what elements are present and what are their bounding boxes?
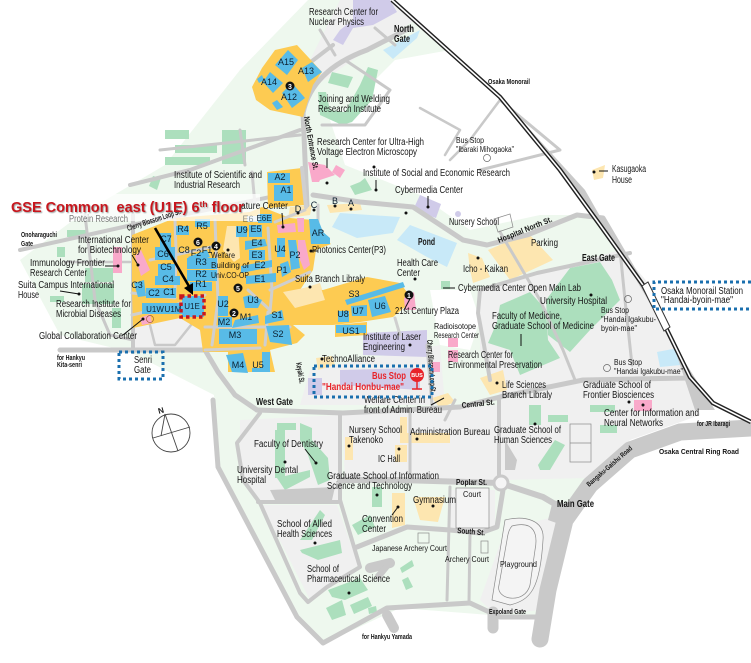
building name labels: Nursery School <box>449 217 499 228</box>
building name labels: Cybermedia Center Open Main Lab <box>458 283 581 294</box>
building name labels: Life Sciences <box>502 380 546 391</box>
green faculty buildings <box>50 67 620 620</box>
pink special buildings <box>113 162 652 411</box>
building name labels: School of Allied <box>277 519 332 530</box>
building name labels: Icho - Kaikan <box>463 264 508 275</box>
building name labels: Japanese Archery Court <box>372 544 448 553</box>
pale yellow facilities <box>282 165 605 528</box>
building codes: U1E <box>184 302 200 311</box>
building codes: S3 <box>348 289 360 299</box>
building name labels: Frontier Biosciences <box>583 390 654 401</box>
building name labels: for Biotechnology <box>78 245 141 256</box>
building name labels: Protein Research <box>69 214 128 225</box>
building codes: U9 <box>236 225 248 235</box>
numbered building markers: 5 <box>236 286 240 293</box>
building name labels: Gymnasium <box>413 495 456 506</box>
building codes: C6 <box>157 249 169 259</box>
buildings A12 to A15 <box>257 50 322 110</box>
building codes: C <box>311 200 318 210</box>
building name labels: Health Sciences <box>277 529 332 540</box>
building codes: E6E <box>256 214 272 223</box>
building name labels: ature Center <box>241 201 289 212</box>
building codes: E6 <box>242 214 254 224</box>
building codes: F2 <box>191 248 201 258</box>
building name labels: Voltage Electron Microscopy <box>317 147 417 158</box>
building codes: A13 <box>298 66 314 76</box>
building name labels: House <box>18 290 39 301</box>
building name labels: "Ibaraki Mihogaoka" <box>456 145 514 154</box>
building name labels: Global Collaboration Center <box>39 331 138 342</box>
building codes: D <box>295 204 302 214</box>
building codes: P2 <box>289 250 301 260</box>
compass: N <box>157 406 165 416</box>
building name labels: Industrial Research <box>174 180 240 191</box>
building name labels: Kita-senri <box>57 362 82 369</box>
building name labels: Faculty of Medicine, <box>492 311 562 322</box>
building name labels: Research Institute <box>318 104 381 115</box>
building codes: S2 <box>272 329 284 339</box>
title: GSE Common east (U1E) 6 <box>11 200 200 216</box>
building codes: C1 <box>163 287 175 297</box>
building name labels: Osaka Monorail <box>488 79 530 86</box>
building name labels: Suita Campus International <box>18 280 114 291</box>
building name labels: "Handai Igakubu-mae" <box>614 367 683 376</box>
building name labels: School of <box>307 564 339 575</box>
building name labels: Administration Bureau <box>410 427 490 438</box>
water: ponds <box>332 30 681 367</box>
building name labels: Takenoko <box>349 435 383 446</box>
building name labels: Graduate School of <box>494 425 561 436</box>
gate and street labels: Main Gate <box>557 499 594 510</box>
building name labels: Research Center <box>434 331 479 340</box>
gate and street labels: South St. <box>457 526 486 537</box>
gate and street labels: Bangaku-Gaishu Road <box>586 445 634 489</box>
building name labels: Immunology Frontier <box>30 258 106 269</box>
building name labels: Research Institute for <box>56 299 132 310</box>
building codes: C5 <box>160 262 172 272</box>
building name labels: Bus Stop <box>614 358 642 367</box>
numbered building markers: 3 <box>288 84 292 91</box>
highlight: U1E building <box>181 296 204 317</box>
building name labels: Pharmaceutical Science <box>307 574 390 585</box>
building name labels: Photonics Center(P3) <box>312 245 386 256</box>
internal campus roads <box>132 168 400 350</box>
building name labels: Onoharaguchi <box>21 232 57 239</box>
building name labels: House <box>612 175 632 186</box>
building name labels: TechnoAlliance <box>322 354 375 365</box>
building codes: R2 <box>195 269 207 279</box>
building name labels: International Center <box>78 235 150 246</box>
highlight: Senri Gate: Gate <box>134 365 151 376</box>
building codes: R5 <box>196 221 208 231</box>
buildings S and U6 to U8 <box>265 282 405 345</box>
monorail station <box>642 282 670 331</box>
building name labels: Parking <box>531 238 558 249</box>
building name labels: Institute of Scientific and <box>174 170 262 181</box>
map markers <box>78 166 644 594</box>
building codes: R1 <box>195 279 207 289</box>
building name labels: Engineering <box>363 342 405 353</box>
main campus yellow zone <box>113 45 652 411</box>
building name labels: Suita Branch Libraly <box>295 274 365 285</box>
building name labels: IC Hall <box>378 454 400 465</box>
building codes: U2 <box>217 299 229 309</box>
building codes: U8 <box>337 309 349 319</box>
arrow to U1E <box>155 228 193 295</box>
building codes: M1 <box>240 312 252 322</box>
building codes: A14 <box>261 77 277 87</box>
building name labels: Research Center for Ultra-High <box>317 137 424 148</box>
building name labels: Research Center <box>30 268 88 279</box>
building name labels: front of Admin. Bureau <box>364 405 442 416</box>
gate and street labels: Hospital North St. <box>496 215 554 245</box>
gate and street labels <box>126 116 634 537</box>
building name labels: Graduate School of Information <box>327 471 439 482</box>
building codes: F1 <box>202 245 212 255</box>
numbered building markers: 4 <box>214 244 218 251</box>
building name labels: Human Sciences <box>494 435 552 446</box>
building name labels: Science and Technology <box>327 481 412 492</box>
buildings A1 and A2 <box>268 173 293 201</box>
building codes: A1 <box>280 185 292 195</box>
building codes: U6 <box>374 301 386 311</box>
building name labels: Graduate School of Medicine <box>492 321 594 332</box>
building codes: E5 <box>250 224 262 234</box>
building name labels: for Hankyu <box>57 355 85 362</box>
building codes: C4 <box>162 274 174 284</box>
gate and street labels: West Gate <box>256 397 293 408</box>
building name labels: Welfare Center in <box>364 395 425 406</box>
building name labels: Bus Stop <box>601 306 629 315</box>
building name labels: North <box>394 24 414 35</box>
building name labels: Microbial Diseases <box>56 309 121 320</box>
building name labels: Pond <box>418 237 435 248</box>
building name labels: Center <box>397 268 421 279</box>
numbered building markers <box>194 82 414 318</box>
building name labels: Univ.CO-OP <box>211 270 249 280</box>
building name labels: Nursery School <box>349 425 402 436</box>
building codes: C3 <box>131 280 143 290</box>
gate and street labels: Central St. <box>461 398 495 410</box>
building codes: U1W <box>146 305 164 314</box>
building codes: A2 <box>274 172 286 182</box>
building codes: AR <box>312 228 325 238</box>
building codes: A12 <box>281 92 297 102</box>
building codes: M2 <box>218 317 230 327</box>
building codes: E2 <box>254 260 266 270</box>
building codes: US1 <box>342 326 360 336</box>
highlight: Bus Stop Handai Honbu-mae: BUS <box>411 373 423 379</box>
building name labels: Gate <box>394 34 410 45</box>
building codes: M3 <box>229 330 241 340</box>
building codes: R3 <box>195 257 207 267</box>
building codes: U7 <box>352 306 364 316</box>
gate and street labels: Poplar St. <box>456 478 487 487</box>
building name labels: Kasugaoka <box>612 164 646 175</box>
building name labels: Court <box>463 490 482 499</box>
building codes: U5 <box>252 360 264 370</box>
building name labels: Graduate School of <box>583 380 651 391</box>
lavender research buildings <box>308 0 461 395</box>
building codes: U1M <box>165 305 182 314</box>
building codes: R4 <box>177 224 189 234</box>
building name labels: Branch Libraly <box>502 390 552 401</box>
numbered building markers: 6 <box>196 240 200 247</box>
numbered building markers: 1 <box>407 293 411 300</box>
building name labels: Institute of Laser <box>363 332 422 343</box>
building name labels: University Dental <box>237 465 298 476</box>
building codes: U3 <box>247 295 259 305</box>
building codes: E3 <box>251 250 263 260</box>
building codes: C7 <box>160 234 172 244</box>
building codes: A <box>348 198 354 208</box>
building name labels: Bus Stop <box>456 136 484 145</box>
building codes: M4 <box>232 360 244 370</box>
building codes: U4 <box>274 244 286 254</box>
building name labels: Gate <box>21 241 33 248</box>
building name labels: Expoland Gate <box>489 609 526 616</box>
building name labels: for JR Ibaragi <box>697 421 730 428</box>
monorail line <box>392 0 751 422</box>
highlight: Senri Gate: Senri <box>134 355 152 366</box>
compass <box>152 406 190 452</box>
highlight: Bus Stop Handai Honbu-mae: "Handai Honbu-mae" <box>322 382 404 393</box>
building name labels: Convention <box>362 514 403 525</box>
building codes: C2 <box>148 288 160 298</box>
building name labels: byoin-mae" <box>601 324 637 333</box>
buildings R, C and U1 <box>134 219 217 317</box>
building name labels: Center for Information and <box>604 408 699 419</box>
title backdrop band <box>8 194 260 221</box>
building name labels: Welfare <box>211 250 235 260</box>
buildings E, U and M <box>218 214 330 373</box>
title: th <box>200 199 208 209</box>
building name labels: Osaka Central Ring Road <box>659 449 739 456</box>
building name labels: University Hospital <box>540 296 607 307</box>
building codes: E4 <box>251 238 263 248</box>
building codes: S1 <box>271 310 283 320</box>
leader lines <box>60 154 632 515</box>
building name labels: Building of <box>211 260 250 270</box>
building name labels: Research Center for <box>448 350 513 361</box>
highlight: Bus Stop Handai Honbu-mae: Bus Stop <box>372 371 406 382</box>
highlight: Senri Gate <box>119 352 163 379</box>
gate and street labels: Keyaki St. <box>294 362 307 384</box>
building name labels: Research Center for <box>309 7 379 18</box>
building name labels: Joining and Welding <box>318 94 390 105</box>
gate and street labels: East Gate <box>582 253 615 264</box>
building name labels: Neural Networks <box>604 418 663 429</box>
building codes: A15 <box>278 57 294 67</box>
title: floor <box>208 200 244 216</box>
building name labels: Nuclear Physics <box>309 17 364 28</box>
building name labels: Hospital <box>237 475 266 486</box>
gate and street labels: North Entrance St. <box>302 116 320 171</box>
building name labels: Institute of Social and Economic Research <box>363 168 510 179</box>
numbered building markers: 2 <box>232 311 236 318</box>
highlight: Osaka Monorail Station <box>654 282 751 309</box>
building name labels: Playground <box>500 560 537 569</box>
gate and street labels: Cherry Blossom Loop St. <box>425 340 438 393</box>
highlight: Osaka Monorail Station: "Handai-byoin-mae" <box>661 295 733 306</box>
building name labels: 21st Century Plaza <box>395 306 459 317</box>
building codes: C8 <box>178 245 190 255</box>
building name labels: Center <box>362 524 387 535</box>
highlight: Bus Stop Handai Honbu-mae <box>314 366 432 397</box>
building codes: B <box>332 196 338 206</box>
building codes <box>131 57 386 370</box>
building name labels: for Hankyu Yamada <box>362 634 412 641</box>
building codes: P1 <box>276 265 288 275</box>
building name labels: Radioisotope <box>434 322 476 331</box>
sports courts and playground <box>418 214 591 605</box>
building name labels: Health Care <box>397 258 438 269</box>
building name labels: Cybermedia Center <box>395 185 464 196</box>
gate and street labels: Cherry Blossom Loop St. <box>126 207 182 233</box>
building name labels: Archery Court <box>445 555 490 564</box>
building name labels: Faculty of Dentistry <box>254 439 323 450</box>
building name labels: "Handai Igakubu- <box>601 315 656 324</box>
building name labels: Environmental Preservation <box>448 360 542 371</box>
building codes: E1 <box>254 274 266 284</box>
blue university buildings <box>134 50 405 373</box>
